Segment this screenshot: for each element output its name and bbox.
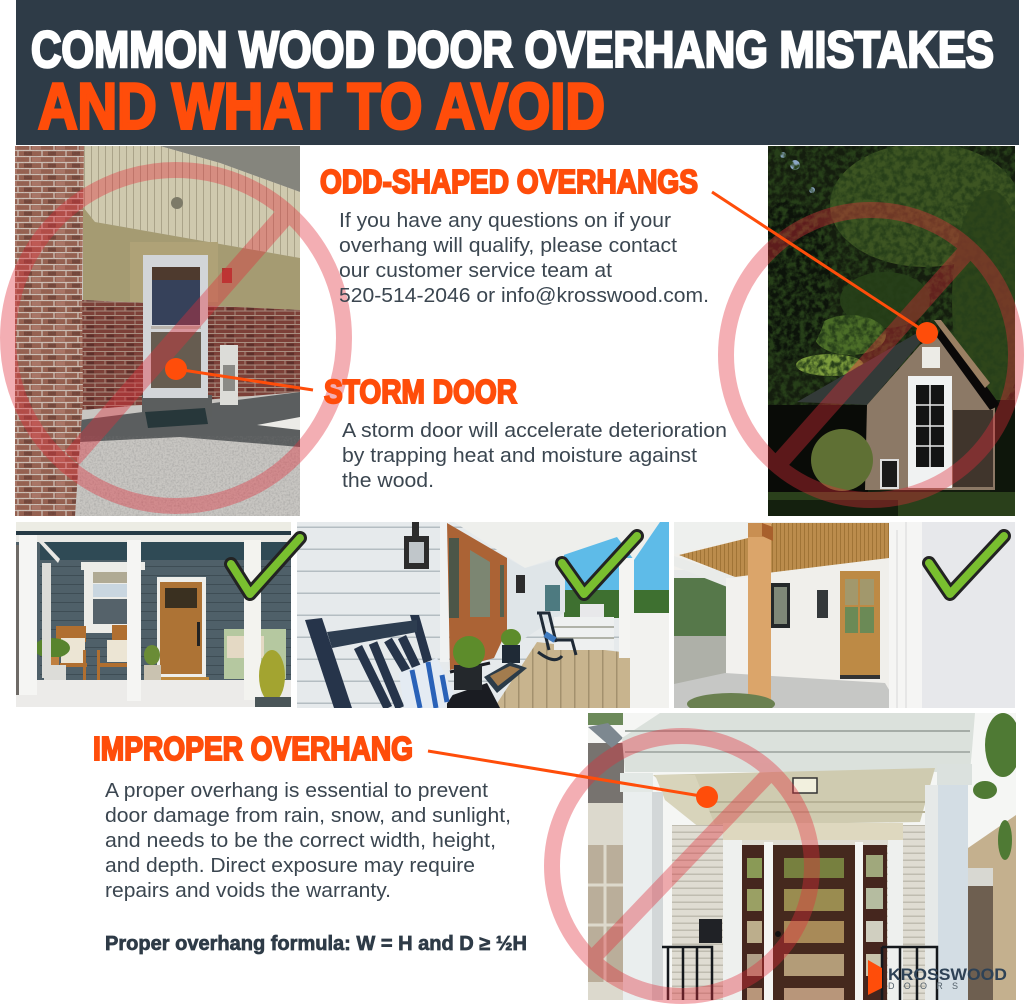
check mark 1 [231,538,300,594]
prohibition sign: storm door [8,170,344,506]
shed door [908,376,952,488]
callout arrow: improper overhang [428,751,718,808]
tree foliage [973,713,1021,860]
boxwood planter [453,636,485,690]
logo: Krosswood Doors: KROSSWOOD [888,965,1007,984]
porch rocking chairs [56,625,127,687]
wooden door [157,577,206,677]
body text [342,419,727,492]
body text [339,209,709,307]
logo: Krosswood Doors: DOORS [888,981,958,991]
body text: repairs and voids the warranty. [105,879,391,902]
section: odd-shaped overhangs [320,163,709,307]
body text: and needs to be the correct width, height, [105,829,496,852]
check mark 3 [929,536,1004,594]
callout arrow: odd-shaped overhang [712,192,938,344]
body text: and depth. Direct exposure may require [105,854,475,877]
photo: house with storm door [15,146,300,516]
heading: ODD-SHAPED OVERHANGS [320,163,698,200]
body text: 520-514-2046 or info@krosswood.com. [339,284,709,307]
storm door [143,255,208,398]
formula: Proper overhang formula: W = H and D ≥ ½H [105,933,527,955]
railings [662,947,937,1000]
far rocking chair [537,613,576,660]
logo: Krosswood Doors [868,960,1007,995]
prohibition sign: odd-shaped overhang [726,210,1016,500]
title line 2: AND WHAT TO AVOID [38,70,605,142]
photo: approved porch, blue house [16,522,291,707]
callout arrow: storm door [165,358,313,390]
body text: If you have any questions on if your [339,209,671,232]
section: storm door [324,373,727,492]
photo: improper overhang entry [588,713,1016,1000]
section: improper overhang [93,730,527,955]
body text [105,779,511,902]
blue cushion [399,658,454,708]
photo: approved porch, rocking chair [297,522,669,708]
body text: overhang will qualify, please contact [339,234,677,257]
entry door with sidelights [742,845,887,1000]
wall lantern [404,522,429,569]
body text: A proper overhang is essential to prevent [105,779,488,802]
double entry door [447,523,507,670]
header banner [16,0,1019,145]
photo: odd-shaped overhang shed [768,146,1015,516]
heading: IMPROPER OVERHANG [93,730,413,767]
foreground rocking chair [305,615,500,708]
photo: approved porch, wood ceiling [674,522,1015,708]
body text: A storm door will accelerate deterioration [342,419,727,442]
body text: by trapping heat and moisture against [342,444,697,467]
check mark 2 [562,536,637,594]
body text: the wood. [342,469,434,492]
body text: our customer service team at [339,259,612,282]
body text: door damage from rain, snow, and sunlight, [105,804,511,827]
glass door [840,571,880,679]
green check marks [231,536,1004,594]
porch ceiling [454,522,660,568]
prohibition sign: improper overhang [552,736,812,996]
heading: STORM DOOR [324,373,517,410]
